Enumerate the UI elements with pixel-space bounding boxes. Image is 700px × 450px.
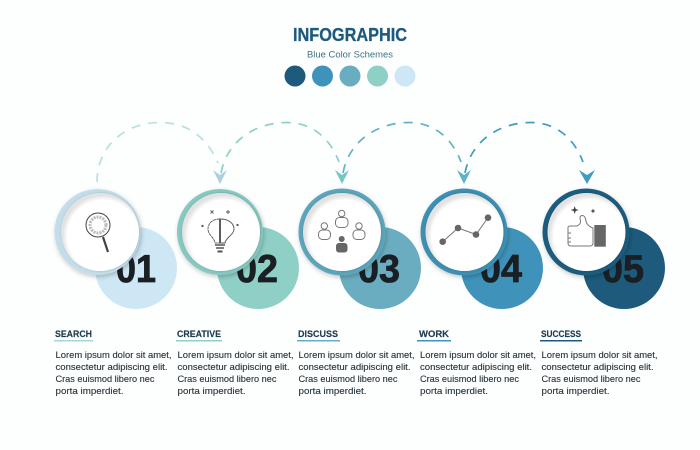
colour swatches xyxy=(284,66,416,86)
arrow 2 to 3 xyxy=(221,122,349,184)
disc 3 xyxy=(303,193,381,271)
step 5: success xyxy=(542,188,665,309)
text block: discuss: Lorem ipsum dolor sit amet, xyxy=(298,350,414,360)
text block: work: WORK xyxy=(419,329,449,340)
ring 1 xyxy=(54,189,140,275)
text block: work: Cras euismod libero nec xyxy=(420,374,519,384)
text block: success: Lorem ipsum dolor sit amet, xyxy=(542,350,658,360)
back circle 2 xyxy=(217,227,299,309)
text block: success: porta imperdiet. xyxy=(542,386,610,396)
text block: work: porta imperdiet. xyxy=(420,386,488,396)
number 02: 02 xyxy=(236,248,278,291)
step 4: work xyxy=(420,188,543,309)
back circle 3 xyxy=(339,227,421,309)
number 03: 03 xyxy=(358,248,400,291)
text block: success: consectetur adipiscing elit. xyxy=(542,362,654,372)
text block: search: Cras euismod libero nec xyxy=(56,374,155,384)
text block: discuss: DISCUSS xyxy=(298,329,339,340)
text block: discuss: porta imperdiet. xyxy=(298,386,366,396)
disc 5 xyxy=(548,193,626,271)
number 01: 01 xyxy=(116,248,156,291)
ring 4 xyxy=(420,188,508,276)
text block: creative xyxy=(176,329,294,396)
back circle 4 xyxy=(461,227,543,309)
disc 1 xyxy=(61,193,139,271)
text block: search: porta imperdiet. xyxy=(56,386,124,396)
text block: creative: CREATIVE xyxy=(177,329,222,340)
text block: search xyxy=(54,329,172,396)
arrow 3 to 4 xyxy=(343,122,471,184)
number 04: 04 xyxy=(480,248,522,291)
icon: light bulb xyxy=(202,210,238,252)
text block: creative: Lorem ipsum dolor sit amet, xyxy=(178,350,294,360)
arrow 4 to 5 xyxy=(465,122,595,184)
back circle 5 xyxy=(583,227,665,309)
disc 4 xyxy=(426,193,504,271)
text block: success xyxy=(540,329,658,396)
text block: discuss: consectetur adipiscing elit. xyxy=(298,362,410,372)
ring 2 xyxy=(177,189,263,275)
icon: line chart xyxy=(439,214,491,245)
subtitle: Blue Color Schemes xyxy=(307,50,393,60)
step 2: creative xyxy=(177,189,299,309)
arrow 1 to 2 xyxy=(97,122,227,184)
text block: search: consectetur adipiscing elit. xyxy=(56,362,168,372)
title: INFOGRAPHIC xyxy=(293,24,407,45)
icon: thumbs up xyxy=(568,206,606,247)
text block: search: SEARCH xyxy=(55,329,92,340)
disc 2 xyxy=(182,193,260,271)
text block: creative: porta imperdiet. xyxy=(178,386,246,396)
text block: creative: Cras euismod libero nec xyxy=(178,374,277,384)
text block: discuss: Cras euismod libero nec xyxy=(298,374,398,384)
text block: work xyxy=(417,329,536,396)
ring 5 xyxy=(542,188,630,276)
back circle 1 xyxy=(95,227,177,309)
text block: success: SUCCESS xyxy=(541,329,582,340)
step 1: search xyxy=(54,189,177,309)
text block: creative: consectetur adipiscing elit. xyxy=(178,362,290,372)
text block: success: Cras euismod libero nec xyxy=(542,374,641,384)
number 05: 05 xyxy=(602,248,644,291)
text block: work: consectetur adipiscing elit. xyxy=(420,362,532,372)
text block: discuss xyxy=(297,329,414,396)
text block: work: Lorem ipsum dolor sit amet, xyxy=(420,350,536,360)
ring 3 xyxy=(298,188,386,276)
icon: magnifier xyxy=(86,213,110,252)
step 3: discuss xyxy=(298,188,421,309)
icon: people xyxy=(318,210,365,252)
text block: search: Lorem ipsum dolor sit amet, xyxy=(56,350,172,360)
